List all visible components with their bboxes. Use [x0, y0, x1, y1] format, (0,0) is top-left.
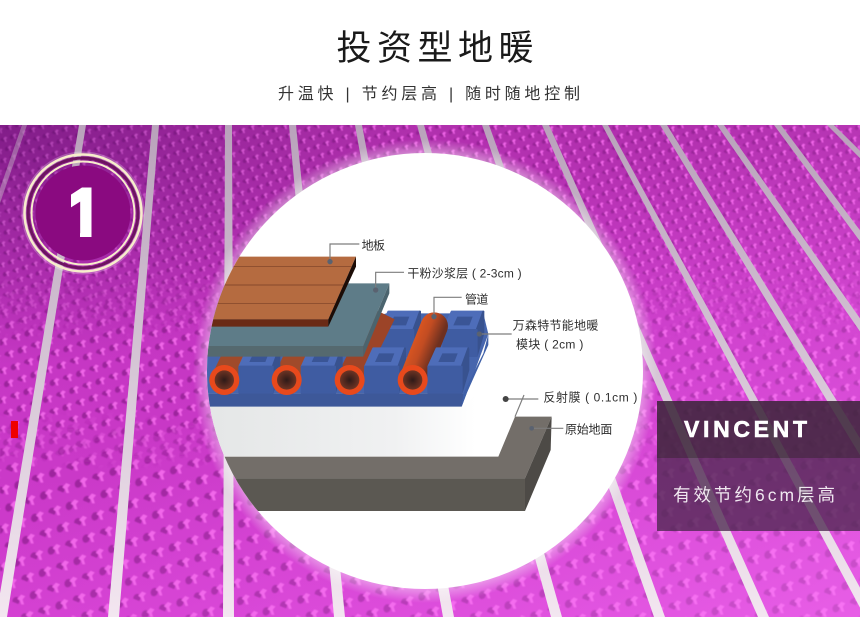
layer: dry mortar slab — [200, 283, 389, 357]
chart: floor heating layer diagram — [200, 238, 637, 511]
subtitle: 升温快 | 节约层高 | 随时随地控制 — [278, 85, 580, 103]
labels: layer names: 管道 — [465, 291, 488, 306]
icon: red mark — [11, 421, 18, 438]
leader lines and dots — [330, 244, 563, 428]
labels: layer names: 反射膜 ( 0.1cm ) — [543, 390, 637, 405]
labels: layer names: 地板 — [362, 238, 385, 252]
layer: reflective film — [210, 406, 432, 456]
title: 投资型地暖 — [336, 29, 534, 68]
callout: VINCENT: VINCENT — [684, 416, 807, 442]
labels: layer names: 原始地面 — [565, 422, 612, 436]
layer: blue module base — [200, 312, 488, 407]
layer: heating pipes — [209, 313, 468, 395]
callout: VINCENT: 有效节约6cm层高 — [673, 485, 835, 505]
panel: heated floor photo background — [0, 125, 860, 617]
labels: layer names — [362, 238, 637, 436]
layer: original ground — [200, 417, 552, 511]
layer: wood floor — [200, 257, 356, 327]
panel: white circle — [207, 153, 643, 589]
labels: layer names: 干粉沙浆层 ( 2-3cm ) — [407, 266, 522, 281]
callout: VINCENT — [657, 401, 860, 531]
labels: layer names: 模块 ( 2cm ) — [516, 337, 583, 351]
badge: number 1 — [24, 154, 142, 272]
badge: number 1: 1 — [64, 172, 107, 260]
labels: layer names: 万森特节能地暖 — [513, 317, 598, 332]
